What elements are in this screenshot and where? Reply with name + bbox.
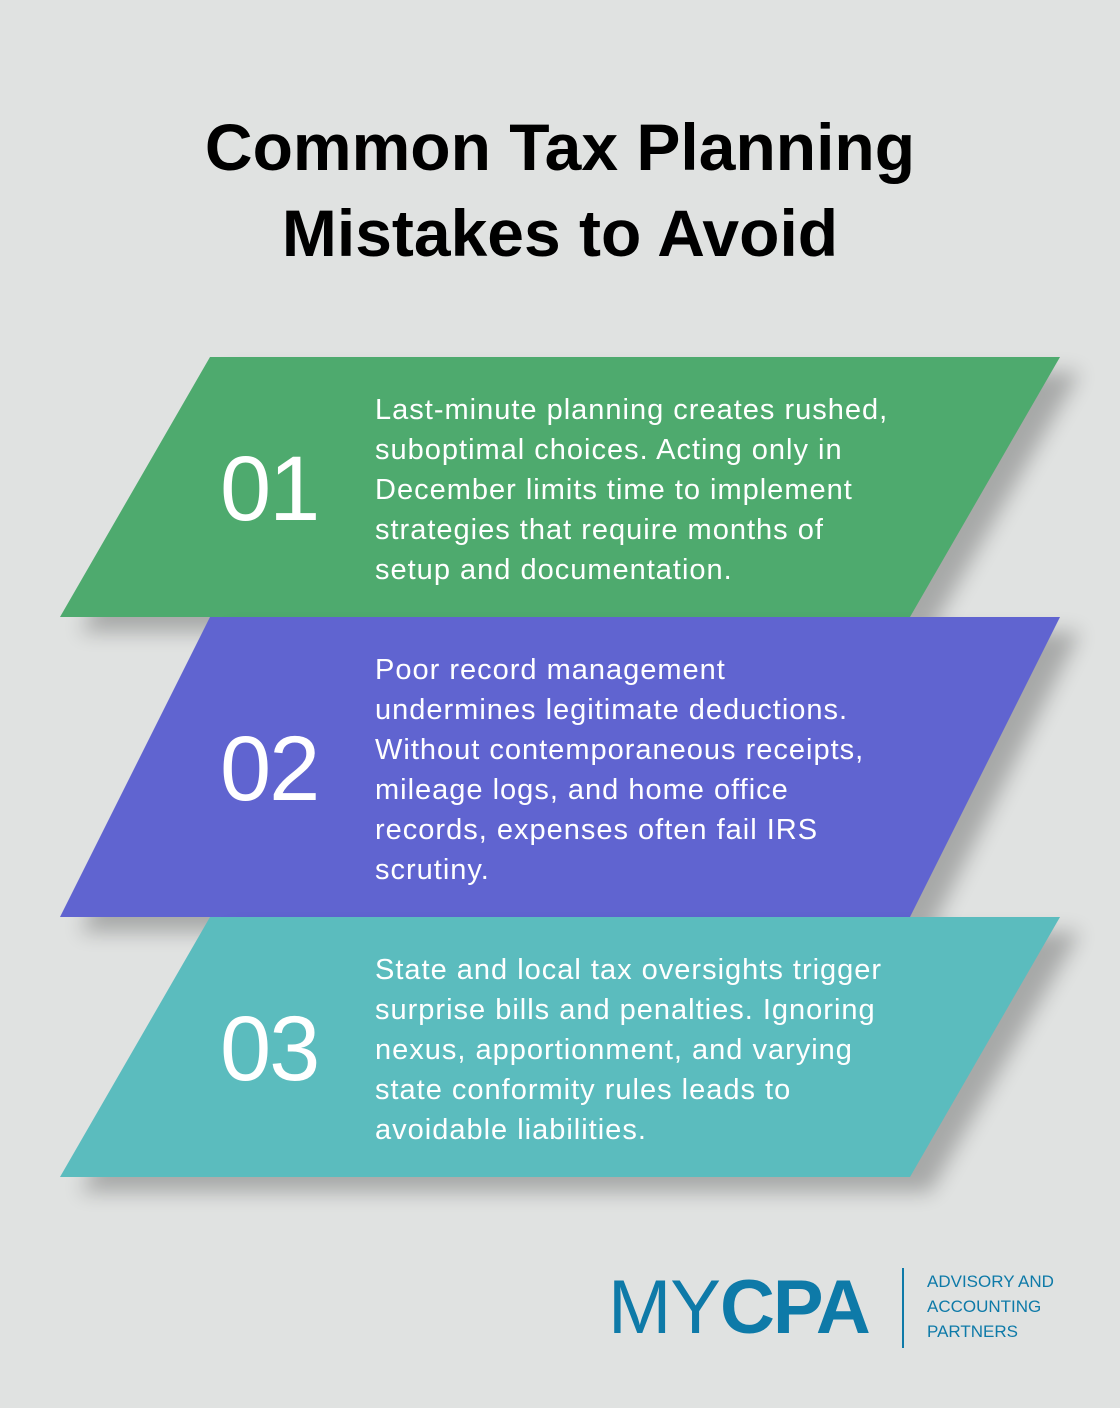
text 3: State and local tax oversights trigger: [375, 954, 882, 986]
text 1: December limits time to implement: [375, 474, 853, 506]
panel 3 shadow: [80, 932, 1080, 1192]
text 3: nexus, apportionment, and varying: [375, 1034, 853, 1066]
logo tagline: ADVISORY AND: [927, 1272, 1054, 1291]
text 3: [375, 954, 882, 1146]
title: [205, 110, 915, 270]
text 2: Without contemporaneous receipts,: [375, 734, 864, 766]
text 2: undermines legitimate deductions.: [375, 694, 848, 726]
text 2: [375, 654, 864, 886]
logo tagline: [927, 1272, 1054, 1341]
text 1: suboptimal choices. Acting only in: [375, 434, 843, 466]
text 3: avoidable liabilities.: [375, 1114, 647, 1146]
title: Common Tax Planning: [205, 110, 915, 184]
text 1: strategies that require months of: [375, 514, 824, 546]
text 2: scrutiny.: [375, 854, 490, 886]
text 2: records, expenses often fail IRS: [375, 814, 818, 846]
text 3: state conformity rules leads to: [375, 1074, 791, 1106]
title: Mistakes to Avoid: [282, 196, 838, 270]
divider: [902, 1268, 904, 1348]
number 01: 01: [220, 438, 318, 540]
panel 1: [60, 357, 1060, 617]
panel 2: [60, 617, 1060, 917]
text 1: [375, 394, 888, 586]
panel 2 shadow: [80, 632, 1080, 932]
logo tagline: ACCOUNTING: [927, 1297, 1041, 1316]
logo wordmark: MYCPA: [608, 1265, 869, 1350]
logo tagline: PARTNERS: [927, 1322, 1018, 1341]
panel 1 shadow: [80, 372, 1080, 632]
logo: [608, 1265, 1054, 1350]
number 03: 03: [220, 998, 318, 1100]
text 2: mileage logs, and home office: [375, 774, 789, 806]
text 1: setup and documentation.: [375, 554, 733, 586]
number 02: 02: [220, 718, 318, 820]
text 2: Poor record management: [375, 654, 726, 686]
panel 3: [60, 917, 1060, 1177]
text 1: Last-minute planning creates rushed,: [375, 394, 888, 426]
text 3: surprise bills and penalties. Ignoring: [375, 994, 876, 1026]
